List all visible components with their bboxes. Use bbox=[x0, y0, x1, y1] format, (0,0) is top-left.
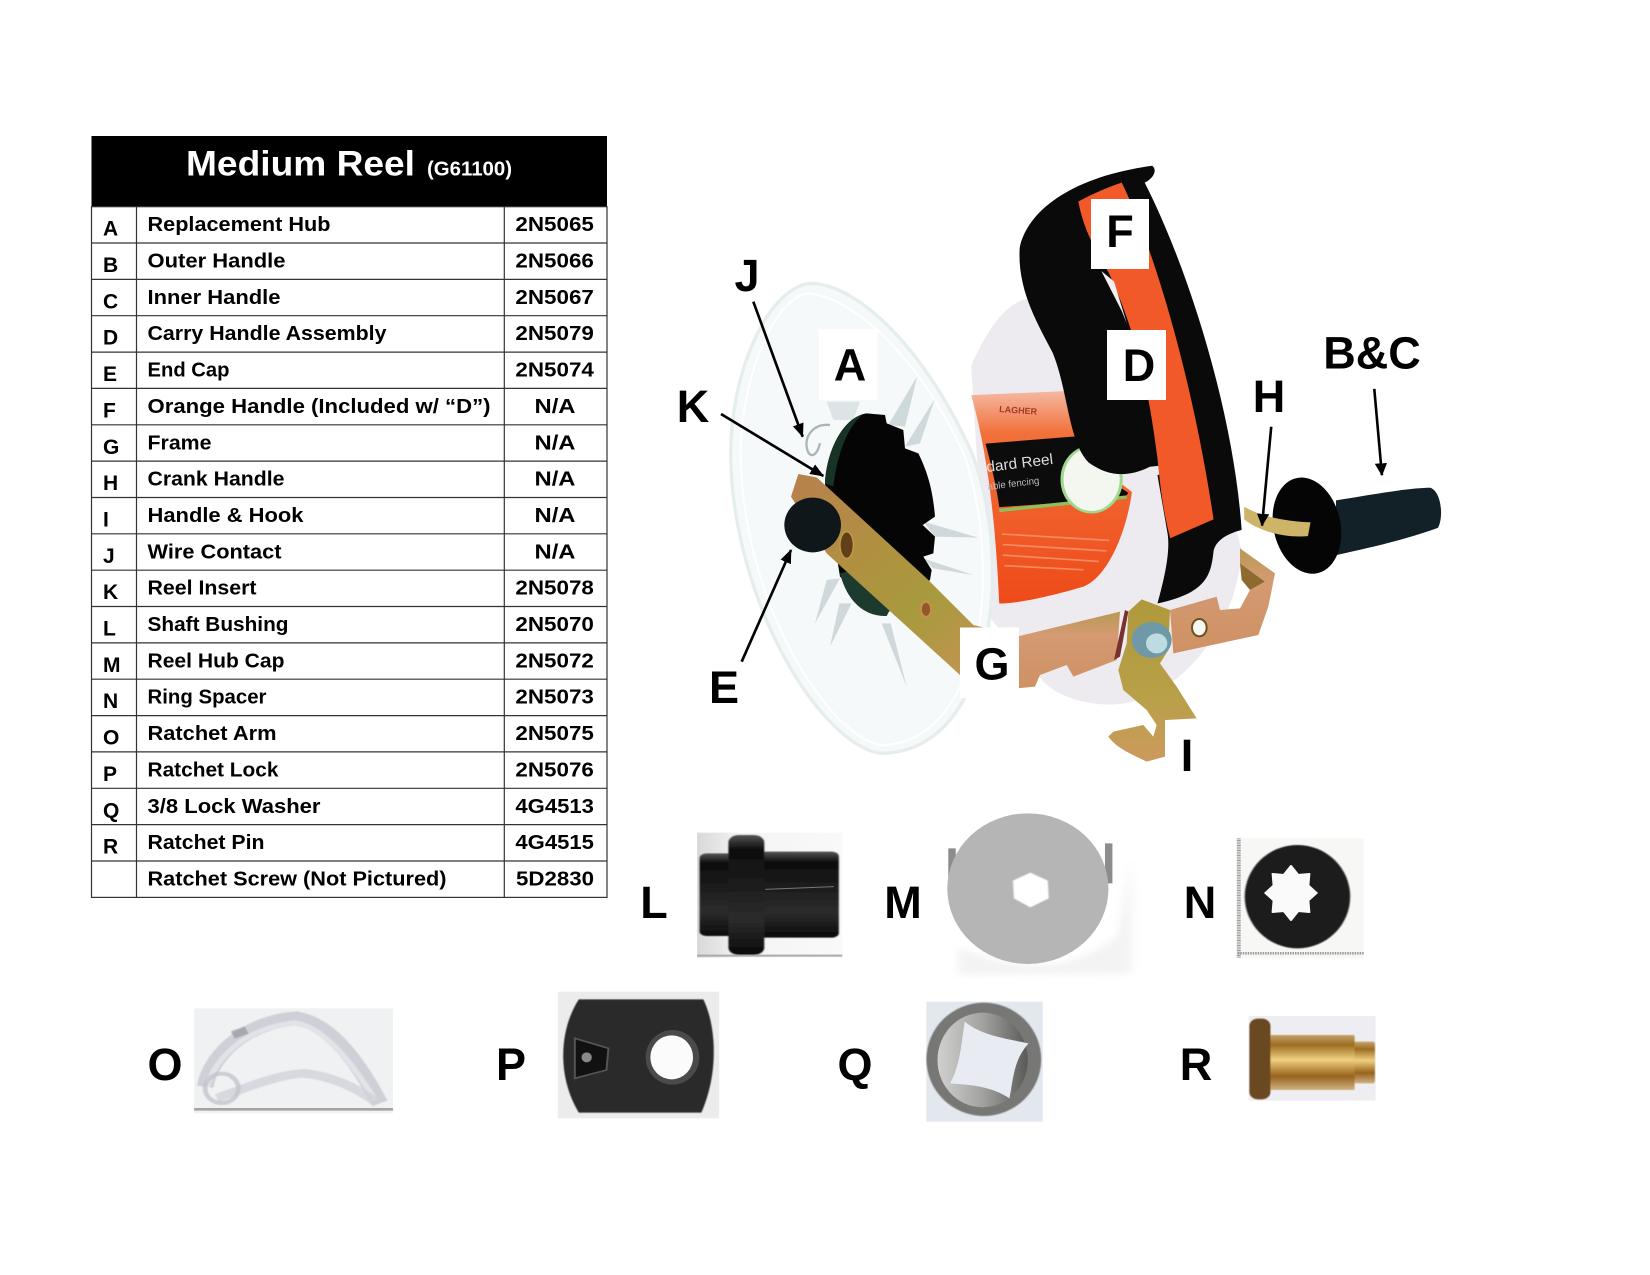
spool body bbox=[971, 298, 1242, 705]
orange product label bbox=[971, 391, 1132, 604]
row F: N/A bbox=[534, 395, 576, 418]
label H: H bbox=[1253, 371, 1285, 422]
row L: L bbox=[103, 618, 116, 640]
row P: Ratchet Lock bbox=[148, 758, 279, 781]
row K: K bbox=[103, 581, 118, 604]
row A: A bbox=[103, 218, 118, 241]
table title bar bbox=[92, 136, 607, 207]
row Q: 3/8 Lock Washer bbox=[148, 795, 321, 818]
row J: Wire Contact bbox=[148, 540, 282, 563]
row ratchet screw: Ratchet Screw (Not Pictured) bbox=[148, 868, 446, 890]
front flange disk bbox=[731, 283, 992, 753]
row K: 2N5078 bbox=[515, 577, 594, 600]
row Q: Q bbox=[103, 799, 119, 822]
part L: shaft bushing: L bbox=[640, 877, 668, 928]
reel assembly illustration bbox=[721, 166, 1441, 780]
row F: F bbox=[103, 399, 116, 422]
row E: E bbox=[103, 363, 117, 386]
row J bbox=[103, 540, 576, 568]
row I: Handle & Hook bbox=[148, 504, 304, 527]
crank knob and grip bbox=[1265, 474, 1441, 577]
row B: B bbox=[103, 254, 118, 277]
part N: ring spacer: N bbox=[1184, 877, 1216, 928]
row A: 2N5065 bbox=[515, 213, 594, 236]
row N: Ring Spacer bbox=[148, 686, 267, 709]
crank strap bbox=[1244, 507, 1311, 536]
row D bbox=[103, 322, 594, 350]
row G: G bbox=[103, 436, 119, 459]
arrow to H bbox=[1262, 427, 1271, 526]
front flange, hub and frame arm bbox=[731, 283, 1020, 753]
part R: ratchet pin bbox=[1180, 1016, 1376, 1101]
white label backgrounds bbox=[819, 199, 1213, 780]
arrow to K bbox=[721, 414, 823, 476]
row R: 4G4515 bbox=[515, 831, 594, 854]
row F bbox=[103, 395, 576, 422]
row O bbox=[103, 722, 594, 750]
row L bbox=[103, 613, 594, 640]
row E: End Cap bbox=[148, 359, 230, 382]
reel label text bbox=[985, 404, 1054, 493]
row Q bbox=[103, 795, 594, 822]
row D: 2N5079 bbox=[515, 322, 594, 345]
arrow to J bbox=[753, 302, 803, 437]
row B: 2N5066 bbox=[515, 250, 594, 272]
flange ribs bbox=[815, 376, 978, 687]
part P: ratchet lock bbox=[496, 992, 719, 1118]
row K: Reel Insert bbox=[148, 577, 257, 600]
part M: reel hub cap bbox=[884, 813, 1131, 975]
row M: Reel Hub Cap bbox=[148, 649, 284, 672]
row P: 2N5076 bbox=[515, 758, 594, 781]
row Q: 4G4513 bbox=[515, 795, 594, 818]
label B&C: B&C bbox=[1323, 328, 1421, 378]
label E: E bbox=[709, 662, 739, 713]
part R: ratchet pin: R bbox=[1180, 1039, 1212, 1090]
row H: H bbox=[103, 472, 118, 495]
label K: K bbox=[677, 381, 710, 432]
row P bbox=[103, 758, 594, 786]
row H: N/A bbox=[534, 468, 576, 491]
label A: A bbox=[834, 340, 866, 390]
orange grip bbox=[1078, 183, 1214, 538]
row C: 2N5067 bbox=[515, 286, 594, 309]
row M bbox=[103, 649, 594, 677]
row R: R bbox=[103, 836, 118, 859]
reel label text: able fencing bbox=[987, 476, 1040, 493]
part L: shaft bushing bbox=[640, 833, 842, 958]
row E: 2N5074 bbox=[515, 359, 595, 382]
row F: Orange Handle (Included w/ “D”) bbox=[148, 395, 490, 418]
row D: Carry Handle Assembly bbox=[148, 322, 387, 345]
frame bar bbox=[1017, 548, 1275, 688]
reel label text: LAGHER bbox=[999, 404, 1038, 417]
row M: 2N5072 bbox=[515, 649, 594, 672]
carry handle bbox=[1019, 166, 1242, 604]
hex bolt bbox=[1132, 622, 1172, 658]
row N bbox=[103, 686, 594, 713]
reel body and handle bbox=[971, 166, 1441, 705]
row I bbox=[103, 504, 576, 532]
row O: O bbox=[103, 727, 119, 750]
row D: D bbox=[103, 327, 118, 350]
part M: reel hub cap: M bbox=[884, 877, 922, 928]
row I: N/A bbox=[534, 504, 576, 527]
part O: ratchet arm: O bbox=[147, 1039, 183, 1090]
row H bbox=[103, 468, 576, 495]
table grid bbox=[92, 207, 607, 897]
table title bar: Medium Reel bbox=[186, 144, 415, 184]
row ratchet screw: 5D2830 bbox=[516, 868, 594, 890]
row A bbox=[103, 213, 594, 241]
end cap knob bbox=[784, 498, 841, 552]
row K bbox=[103, 577, 594, 604]
row O: Ratchet Arm bbox=[148, 722, 276, 745]
row C: Inner Handle bbox=[148, 286, 280, 309]
parts table bbox=[92, 136, 607, 897]
part Q: lock washer: Q bbox=[837, 1039, 873, 1090]
row O: 2N5075 bbox=[515, 722, 594, 745]
row B: Outer Handle bbox=[148, 250, 286, 272]
arrow to E bbox=[742, 550, 791, 662]
row G: N/A bbox=[534, 431, 576, 454]
label J: J bbox=[734, 250, 760, 301]
table title bar: (G61100) bbox=[427, 158, 512, 180]
callout letters on reel bbox=[677, 206, 1421, 781]
row J: J bbox=[103, 545, 115, 568]
part O: ratchet arm bbox=[147, 1008, 393, 1113]
row N: N bbox=[103, 690, 118, 713]
row H: Crank Handle bbox=[148, 468, 284, 491]
row L: Shaft Bushing bbox=[148, 613, 288, 636]
label F: F bbox=[1106, 206, 1134, 257]
part Q: lock washer bbox=[837, 1002, 1043, 1122]
row R: Ratchet Pin bbox=[148, 831, 264, 854]
row L: 2N5070 bbox=[515, 613, 594, 636]
frame right side and hook bbox=[1017, 548, 1275, 762]
row G: Frame bbox=[148, 431, 212, 454]
row N: 2N5073 bbox=[515, 686, 594, 709]
row A: Replacement Hub bbox=[148, 213, 330, 236]
wire contact loop bbox=[806, 425, 830, 455]
black reel insert hub bbox=[825, 413, 935, 613]
row P: P bbox=[103, 763, 117, 786]
reel label text: dard Reel bbox=[985, 451, 1054, 476]
row I: I bbox=[103, 508, 109, 532]
handle and hook bbox=[1108, 599, 1197, 762]
row E bbox=[103, 359, 595, 386]
arrow to B and C bbox=[1374, 389, 1382, 475]
label G: G bbox=[974, 638, 1010, 690]
row M: M bbox=[103, 654, 120, 677]
part P: ratchet lock: P bbox=[496, 1039, 526, 1090]
row B bbox=[103, 250, 594, 277]
frame arm bbox=[791, 474, 1020, 687]
row ratchet screw bbox=[148, 868, 594, 890]
row J: N/A bbox=[534, 540, 576, 563]
row G bbox=[103, 431, 576, 459]
part N: ring spacer bbox=[1184, 838, 1364, 958]
row C: C bbox=[103, 290, 118, 313]
row R bbox=[103, 831, 594, 859]
label I: I bbox=[1181, 730, 1193, 781]
row C bbox=[103, 286, 594, 313]
label D: D bbox=[1123, 340, 1155, 391]
